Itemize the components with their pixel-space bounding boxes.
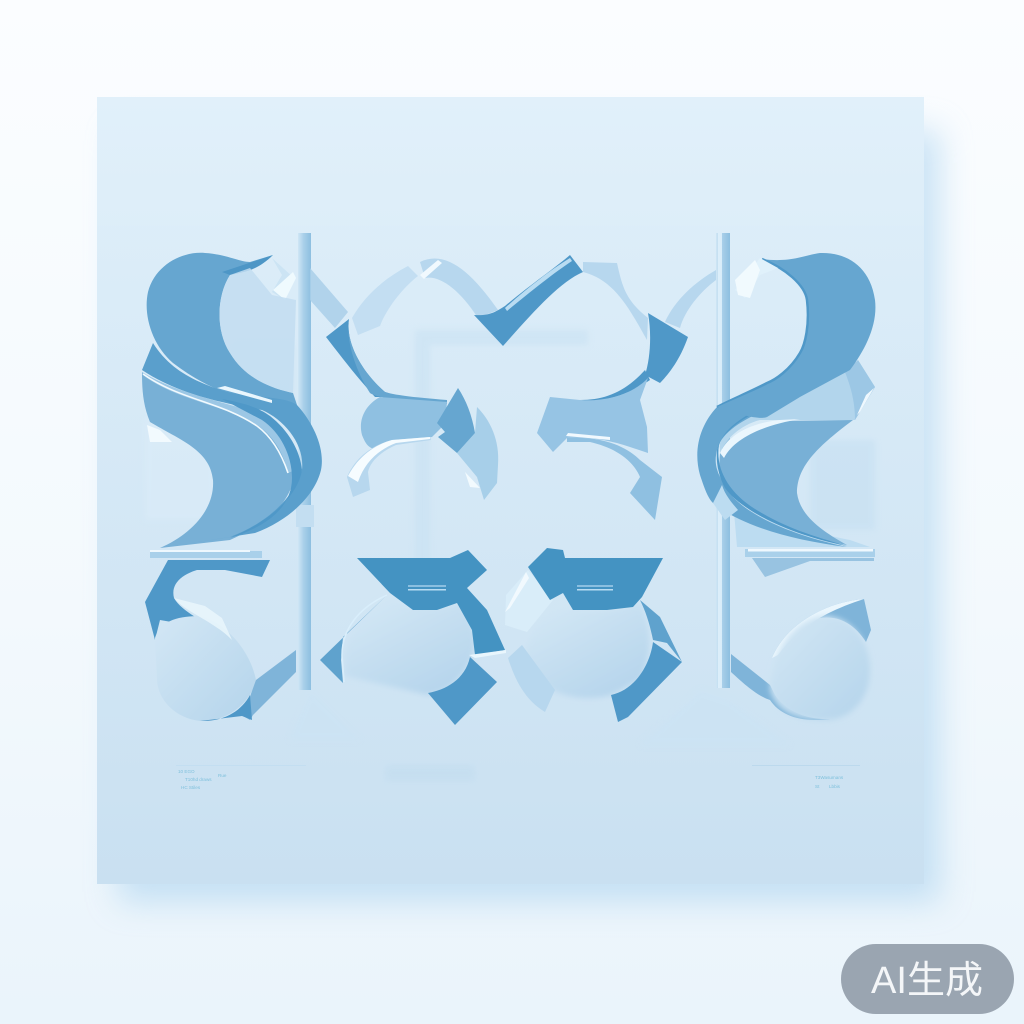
left footer caption: HC Stiles — [181, 785, 201, 790]
centre-right mid form — [537, 378, 662, 520]
lower-left arc figure — [320, 550, 506, 725]
badge: AI generated — [841, 944, 1014, 1014]
panel shadow — [118, 130, 940, 902]
left footer caption: 10 EGO — [178, 769, 195, 774]
left footer caption: Rue — [218, 773, 227, 778]
left lower C form — [145, 560, 296, 721]
left S: upper lobe — [147, 253, 297, 405]
left vertical pole — [296, 233, 314, 690]
ghost background shapes — [145, 330, 875, 745]
left figure: connector ribbons — [272, 258, 498, 335]
right vertical pole — [716, 233, 730, 688]
main panel — [97, 97, 924, 884]
right footer caption — [752, 765, 860, 789]
right connector arc — [665, 270, 716, 328]
right footer caption: T3Wasumans — [815, 775, 844, 780]
centre-right top arc — [474, 255, 688, 401]
right footer caption: Lbbis — [829, 784, 841, 789]
centre-left mid form — [347, 388, 498, 500]
inner layer panel — [97, 226, 924, 884]
left footer caption — [176, 765, 306, 790]
badge: AI generated: AI生成 — [871, 960, 983, 1002]
right lower C form — [731, 599, 871, 720]
left base bar — [150, 550, 270, 577]
right S: lower sweep — [697, 360, 875, 547]
left footer caption: T10hd draws — [185, 777, 212, 782]
centre footer smudge — [385, 765, 475, 781]
right S: upper lobe — [717, 253, 875, 418]
right footer caption: St — [815, 784, 820, 789]
right base bar — [745, 549, 875, 577]
left S: lower sweep — [142, 343, 322, 548]
lower-right arc figure — [505, 548, 682, 722]
centre-left top arc — [326, 319, 447, 404]
